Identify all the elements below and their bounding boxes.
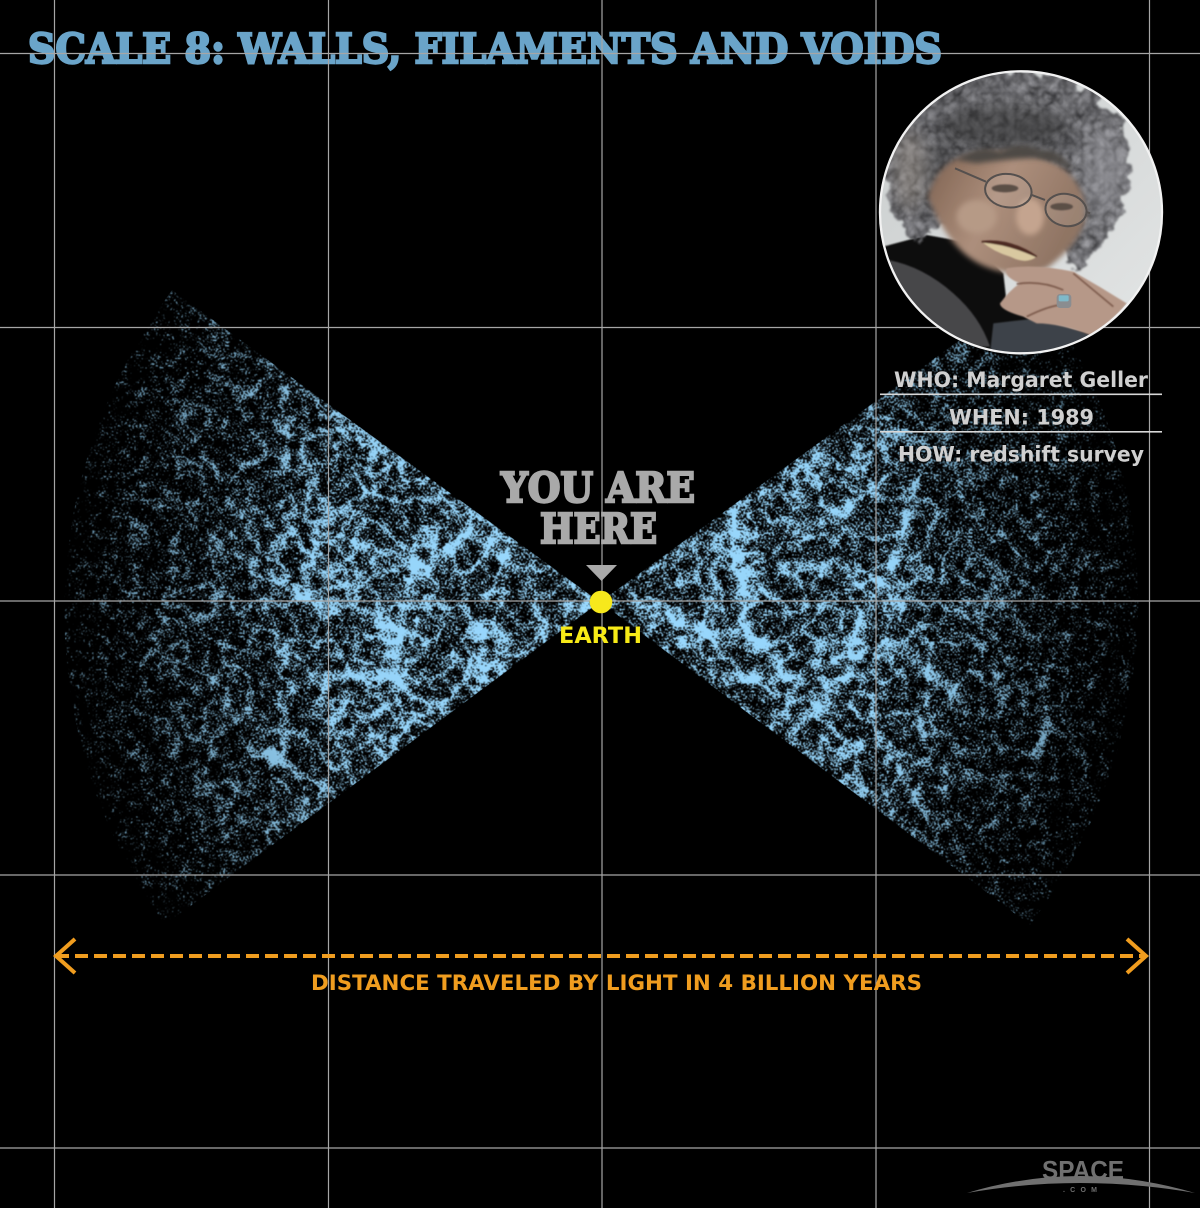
ring: [1057, 294, 1071, 308]
distance label: DISTANCE TRAVELED BY LIGHT IN 4 BILLION YEARS: [311, 971, 922, 996]
lower sweater: [990, 319, 1088, 352]
photo: Margaret Geller portrait: [877, 67, 1167, 360]
divider two: [880, 431, 1162, 433]
you are here label: YOU ARE: [500, 464, 695, 512]
when label: WHEN: 1989: [949, 406, 1094, 430]
divider one: [880, 394, 1162, 395]
collar: [888, 260, 990, 347]
face: [928, 151, 1085, 273]
outer dimming: [64, 290, 1138, 922]
space.com logo: SPACE: [1042, 1155, 1124, 1185]
info: who, when, how: [880, 368, 1162, 466]
cheek highlight: [957, 200, 997, 233]
space.com logo: .COM: [1063, 1187, 1097, 1194]
chart: bow-tie galaxy redshift survey map: [64, 290, 1138, 924]
hair: [884, 72, 1134, 272]
who label: WHO: Margaret Geller: [894, 368, 1149, 392]
galaxy web: left and right survey wedges: [64, 285, 1138, 925]
distance arrow: [56, 939, 1146, 973]
nose highlight: [1016, 198, 1044, 235]
mouth: [982, 241, 1037, 261]
glasses: [955, 168, 1090, 229]
earth label: EARTH: [559, 624, 642, 649]
title: SCALE 8: WALLS, FILAMENTS AND VOIDS: [28, 25, 942, 73]
photo border: [880, 71, 1162, 353]
fringe: [957, 145, 1073, 170]
sweater: [885, 234, 1092, 349]
you are here label: [500, 464, 695, 553]
finger shadows: [1017, 273, 1113, 317]
pointer triangle: [586, 565, 617, 581]
space.com logo: [967, 1155, 1195, 1194]
how label: HOW: redshift survey: [898, 442, 1144, 466]
hand: [1000, 266, 1127, 335]
eyes: [992, 184, 1073, 210]
earth marker: [590, 591, 612, 613]
you are here label: HERE: [540, 505, 657, 553]
